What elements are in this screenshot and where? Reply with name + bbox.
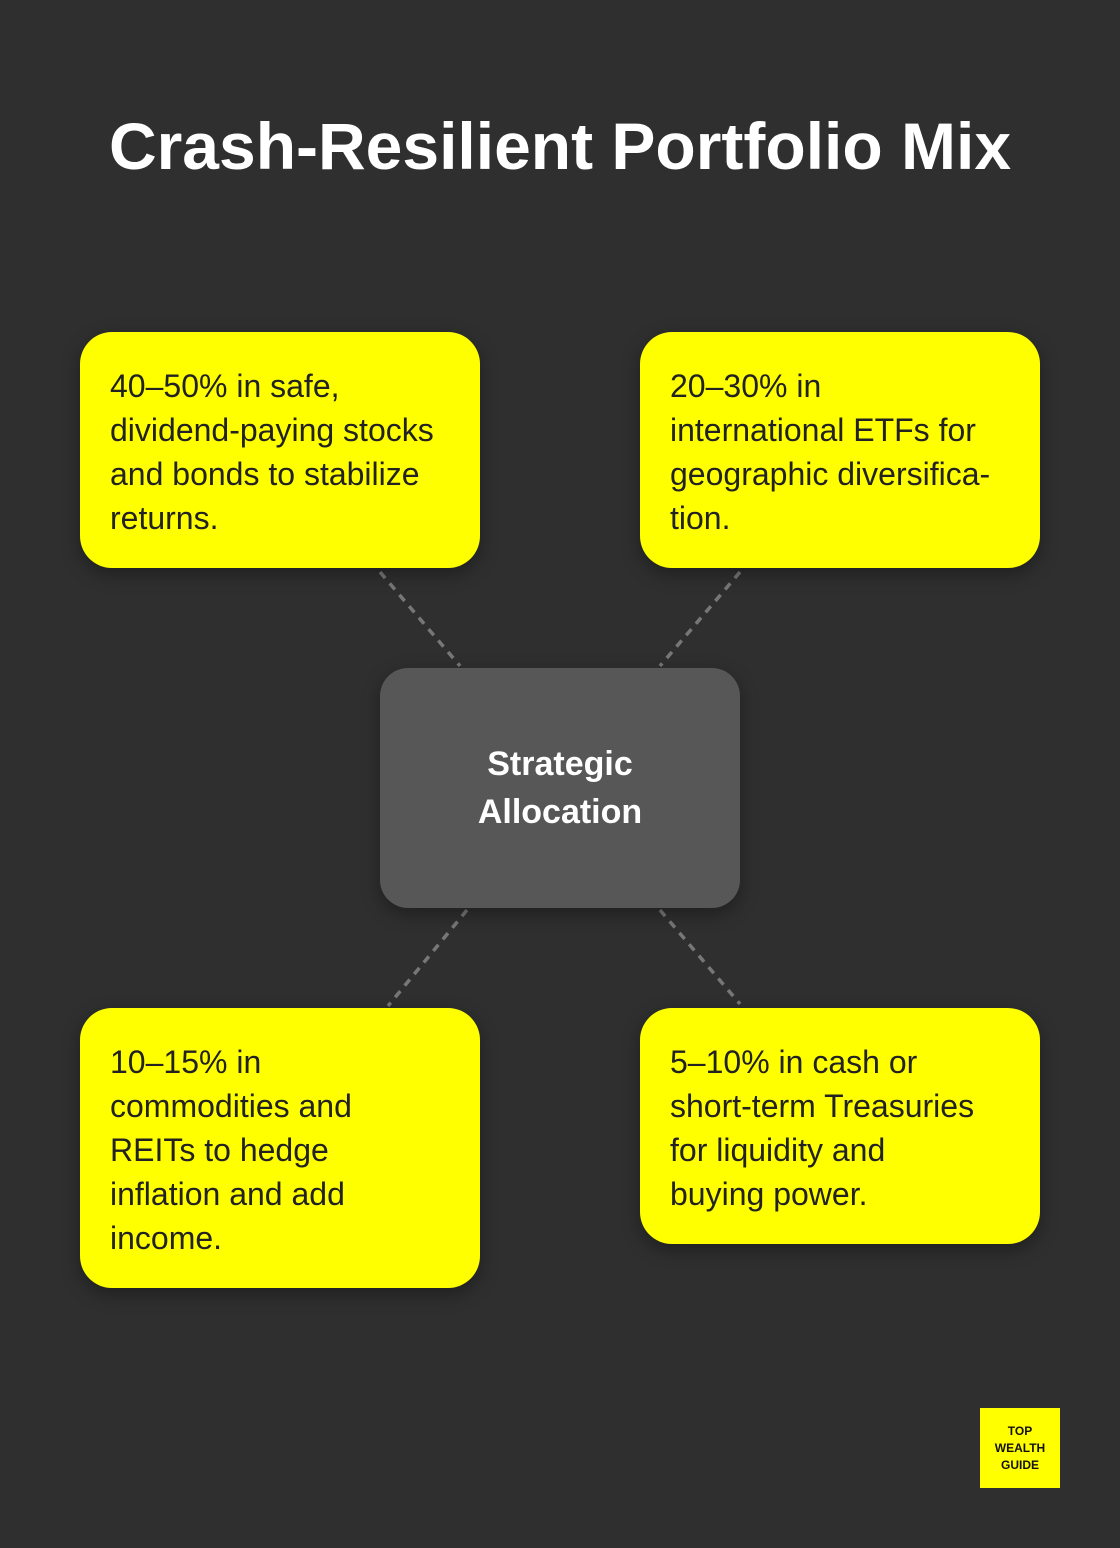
box: cash: short-term Treasuries (670, 1088, 974, 1124)
box: commodities and REITs: commodities and (110, 1088, 352, 1124)
box: cash (640, 1008, 1040, 1244)
logo: WEALTH (995, 1440, 1045, 1454)
box: international ETFs: geographic diversifica- (670, 456, 990, 492)
box: cash: 5–10% in cash or (670, 1044, 917, 1080)
box: commodities and REITs (80, 1008, 480, 1288)
box: cash: buying power. (670, 1176, 867, 1212)
box: stocks and bonds: 40–50% in safe, (110, 368, 340, 404)
center: strategic allocation: Allocation (478, 793, 642, 831)
logo: TOP (1008, 1424, 1032, 1438)
box: stocks and bonds: dividend-paying stocks (110, 412, 434, 448)
box: stocks and bonds (80, 332, 480, 568)
box: commodities and REITs: inflation and add (110, 1176, 345, 1212)
box: international ETFs (640, 332, 1040, 568)
box: commodities and REITs: REITs to hedge (110, 1132, 329, 1168)
logo (980, 1408, 1060, 1488)
box: commodities and REITs: income. (110, 1220, 222, 1256)
title: Crash-Resilient Portfolio Mix (109, 109, 1011, 183)
logo: GUIDE (1001, 1458, 1039, 1472)
box: commodities and REITs: 10–15% in (110, 1044, 261, 1080)
box: stocks and bonds: and bonds to stabilize (110, 456, 420, 492)
box: cash: for liquidity and (670, 1132, 885, 1168)
center: strategic allocation (380, 668, 740, 908)
box: stocks and bonds: returns. (110, 500, 218, 536)
box: international ETFs: international ETFs for (670, 412, 976, 448)
box: international ETFs: tion. (670, 500, 730, 536)
center: strategic allocation: Strategic (487, 745, 633, 783)
box: international ETFs: 20–30% in (670, 368, 821, 404)
